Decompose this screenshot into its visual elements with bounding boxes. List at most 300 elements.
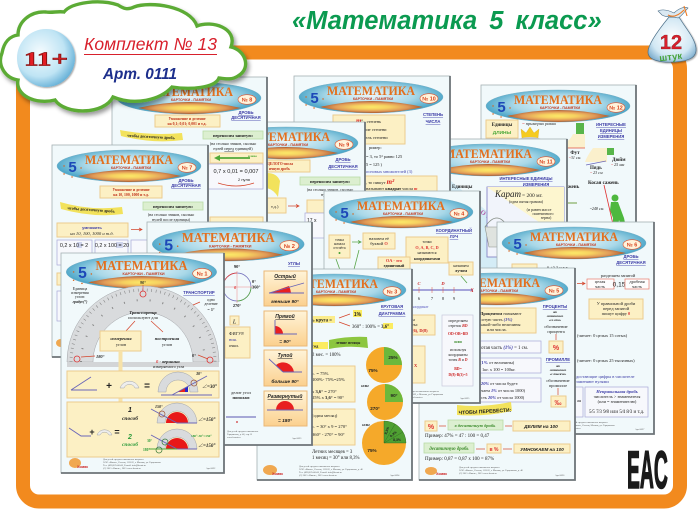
arrow <box>555 334 557 340</box>
box: единичный отрезок: OA - это <box>386 258 403 263</box>
grid box: определяем: OD-OB=BD <box>448 332 468 336</box>
одно деление: деление <box>204 302 218 306</box>
box: и т.д.: т.д.) <box>271 204 279 209</box>
header card 9 <box>214 127 358 159</box>
number line <box>412 281 474 301</box>
box: острый: Острый <box>274 273 296 280</box>
box: называем луч: лучом <box>455 268 467 273</box>
box: расчёт 1: 100%- 75%=25% <box>312 377 345 382</box>
grid box: определяем: D(8)-B(3)=5 <box>449 373 468 377</box>
дюйм <box>611 158 626 167</box>
box: тупой: больше 90° <box>271 378 299 385</box>
EAC mark: EAC <box>627 442 668 500</box>
arrows <box>336 250 467 283</box>
heading <box>423 112 443 124</box>
header card 4 <box>329 196 473 228</box>
blue note: достающие цифры в числителе <box>576 374 635 379</box>
box: координаты: м <box>412 317 415 322</box>
pie chart 8,3%: 8,3% <box>384 426 390 435</box>
box: расчёт 2: 360° - 270° = 90° <box>312 432 345 437</box>
arrow <box>439 425 446 427</box>
box: умножить <box>57 223 128 237</box>
box: неправильная дробь <box>585 387 648 417</box>
footer: ООО «Квант», Россия, 115162, г. Москва, ул. Гарцовская <box>103 461 162 464</box>
number line: 6 <box>418 296 421 301</box>
box: измерения углов: углов <box>116 342 126 347</box>
box: переносим запятую: (на столько знаков, сколько <box>307 187 353 193</box>
footer: Арт 0026 <box>555 474 565 477</box>
box: тупой: Тупой <box>278 352 292 359</box>
header card 6: 5 <box>513 236 522 253</box>
icon: foot <box>559 123 585 148</box>
heading: ДРОБЬ <box>238 110 254 115</box>
box: в % <box>487 444 501 453</box>
header card 12: КАРТОЧКИ - ПАМЯТКИ <box>540 106 581 110</box>
header card 1: КАРТОЧКИ - ПАМЯТКИ <box>123 272 165 276</box>
heading <box>379 304 405 316</box>
box: расчёт 1: с. = 75% <box>312 371 329 376</box>
footer: Хомяк <box>436 472 447 476</box>
header card 6: МАТЕМАТИКА <box>530 229 619 244</box>
примерно равно: ~ примерно равно <box>522 121 557 126</box>
ribbon: чтобы десятичную дробь <box>127 133 176 140</box>
box: карат: Карат <box>494 189 521 199</box>
разделяем запятой: разделяем запятой <box>601 273 636 278</box>
box: координаты: (6), D(8) <box>412 328 428 333</box>
box: определение степени: затель степени <box>360 135 388 140</box>
box: переносим запятую: нулей до... <box>321 192 339 197</box>
box: переносим запятую <box>203 131 263 151</box>
circle of degrees <box>221 264 261 308</box>
icon: permille box <box>551 396 566 407</box>
единицы длины: Единицы <box>492 123 512 128</box>
card 2: углы <box>147 222 312 445</box>
box: точка начала отсчёта: отсчёта <box>333 246 346 250</box>
header card 10 <box>299 81 443 113</box>
box: делим на 100: ДЕЛИМ на 100 <box>523 424 558 430</box>
пример 1: Пример: 47% = 47 : 100 = 0,47 <box>425 434 490 439</box>
circle of degrees: 270° <box>233 303 241 308</box>
box: умножить: умножить <box>82 225 102 230</box>
box: точки <box>406 237 448 263</box>
вершина <box>153 359 184 369</box>
grid box: определяем: точек B и D <box>448 358 468 362</box>
pie chart 25%: 25% <box>388 355 398 360</box>
header card 1: 5 <box>78 265 87 282</box>
panel 2: угол 150: способ <box>122 441 138 448</box>
box: L: L <box>232 318 237 326</box>
header card 2: № 2 <box>284 244 295 250</box>
footer: ООО «Квант», Россия, Москва, ул. Гарцовская <box>567 424 615 427</box>
box: 1% <box>353 310 362 318</box>
box: площадь круга <box>307 316 335 324</box>
box: лево <box>408 346 425 383</box>
фут: Фут <box>570 151 580 156</box>
footer: Арт 0024 <box>390 474 400 477</box>
сажень 2: жень <box>568 185 580 190</box>
header card 12: 5 <box>497 99 506 116</box>
читает 1: (читает: 0 целых 15 сотых) <box>577 333 628 338</box>
box: неправильная дробь: 5⁄5 7⁄3 9⁄8 или 5⁄4 8⁄3 и т.д. <box>589 410 644 415</box>
пядь: ~ 23 см <box>590 170 603 175</box>
card 11: карат <box>411 139 567 351</box>
grid box: пример: 17 x <box>307 218 317 224</box>
grid box: 0,7 x 0,01: 0,7 x 0,01 = 0,007 <box>214 169 258 175</box>
ribbon: чтобы перевести <box>457 402 512 416</box>
circle of degrees: 360° <box>252 284 261 290</box>
header card 11: МАТЕМАТИКА <box>444 146 533 161</box>
header card 3: № 3 <box>387 290 397 296</box>
text: пример: 5 = 125 ) <box>366 162 383 167</box>
box: расчёт 1: х 3,6° = 270° <box>312 389 337 394</box>
построения углов: углов <box>162 342 172 347</box>
единица измерения углов <box>71 287 89 304</box>
год + ribbon: год <box>312 344 319 348</box>
box: определение степени: - степень <box>363 119 381 124</box>
box: переносим запятую <box>300 177 360 197</box>
одно деление: одно <box>207 298 215 302</box>
box: определение степени: n <box>361 118 363 122</box>
header card 12 <box>486 90 630 122</box>
box: 20%: чаем 1% от числа 1000) <box>481 388 526 393</box>
heading <box>231 110 261 120</box>
grid box: третий <box>131 240 159 265</box>
example fractions: 5 +3 3 и т.д. <box>547 265 569 270</box>
box: умножение и деление <box>155 115 220 127</box>
box: острый: меньше 90° <box>271 299 299 305</box>
title: «Математика 5 класс» <box>292 7 602 35</box>
вершина: 0 - вершина <box>156 359 180 364</box>
box: переносим запятую: переносим запятую: <box>213 133 254 138</box>
heading: ДРОБЬ <box>178 178 194 183</box>
box: умножение и деление: Умножение и деление <box>112 188 150 192</box>
label в: в <box>236 419 238 424</box>
box: сотая часть <box>477 341 541 353</box>
целая и дробная часть: 0,15 <box>613 282 626 288</box>
box: верхний <box>512 264 537 274</box>
box: умножаем на 100 <box>514 444 570 453</box>
биссектриса: пополам <box>232 395 250 400</box>
header card 8: КАРТОЧКИ - ПАМЯТКИ <box>171 98 212 102</box>
обозначение 2: обозначение <box>546 378 570 383</box>
box: карат: пшеничного <box>533 211 553 216</box>
blue text: координат <box>412 305 429 309</box>
box: в десятичную дробь: в десятичную дробь <box>455 423 495 428</box>
box: квадрат: , то пишут m² <box>366 178 395 186</box>
grid left <box>555 387 583 417</box>
light blue triangle <box>411 181 501 351</box>
box: единичный отрезок <box>378 257 410 270</box>
number line: D <box>440 281 445 286</box>
box: умножение и деление: на 10, 100, 1000 и т.д. <box>113 193 149 197</box>
248 см: ~248 см. <box>590 206 604 211</box>
heading: ДИАГРАММА <box>379 311 405 316</box>
footer: ООО «Квант», Россия, 115162, г. Москва, ул. Гарцовская, д. 46 <box>459 469 524 472</box>
header card 10: 5 <box>310 90 319 107</box>
box: точки: точки <box>422 240 432 244</box>
card 4: координатный луч <box>324 191 480 403</box>
box: фигура: ния. <box>229 337 237 342</box>
panel 2: угол 150: = <box>114 427 120 437</box>
panel 2: угол 150 <box>67 402 219 457</box>
box: точка начала отсчёта: начала <box>334 242 345 246</box>
heading: ДЕСЯТИЧНАЯ <box>171 183 201 188</box>
blue note <box>576 374 635 384</box>
box: лево: X <box>414 363 418 368</box>
footer: Для детей среднего школьного возраста <box>459 466 500 469</box>
grid box: определяем: или <box>454 339 462 344</box>
heading <box>436 228 472 239</box>
box: карат <box>487 187 564 257</box>
box: в %: в % <box>490 447 499 453</box>
number line: 9 <box>453 296 456 301</box>
cloud badge <box>0 2 246 111</box>
косая сажень: Косая сажень <box>588 181 619 186</box>
pie chart 8,3%: 8,3% <box>389 430 398 438</box>
360 : 100 <box>352 323 393 330</box>
box: L <box>230 316 239 326</box>
год + ribbon: летние месяцы <box>336 341 360 345</box>
heading промилле: ПРОМИЛЛЕ <box>546 357 570 362</box>
box: процентом называют: сотую часть (1%) <box>480 317 513 322</box>
heading: ИНТЕРЕСНЫЕ ЕДИНИЦЫ <box>499 176 553 181</box>
card 3: круговая диаграмма <box>257 269 412 480</box>
icon: crown <box>521 127 539 138</box>
card 9: дробь десятичная <box>209 122 365 334</box>
footer: 115162, г. Москва, ул. Гарцовская <box>409 393 444 396</box>
header card 4: № 4 <box>454 212 464 218</box>
box: влево: влево <box>248 154 257 158</box>
heading: ИЗМЕРЕНИЯ <box>598 134 624 139</box>
icon: stone circle <box>516 137 544 147</box>
box: расчёт 2: с. = 30° х 9 = 270° <box>312 424 347 429</box>
age circle 11+: 11+ <box>24 48 68 70</box>
grid box: определяем <box>442 315 473 386</box>
box: острый <box>264 271 307 306</box>
box: измерения углов <box>100 331 141 351</box>
header card 10: МАТЕМАТИКА <box>327 83 416 98</box>
box: % <box>425 421 437 431</box>
box: умножаем на 100: УМНОЖАЕМ на 100 <box>520 447 564 452</box>
header card 3: МАТЕМАТИКА <box>290 276 379 291</box>
footer: (С) 2015 «Квант», 2015 www.kvant.ru <box>103 467 142 470</box>
header card 5: КАРТОЧКИ - ПАМЯТКИ <box>478 289 519 293</box>
ribbon <box>60 202 123 215</box>
дюйм: ~ 25 мм <box>611 162 625 167</box>
circle of degrees: 90° <box>234 264 240 269</box>
panel 1: угол 30: + <box>106 381 112 392</box>
cloud shape <box>0 2 246 111</box>
text: пример: ример: <box>369 145 382 150</box>
целая и дробная часть <box>587 279 649 289</box>
grid box: 0,2 x 10 = 2 <box>57 240 92 265</box>
heading: ИЗМЕРЕНИЯ <box>523 182 549 187</box>
circle of degrees: 0° <box>252 279 256 284</box>
пример 2: Пример: 0,87 = 0,87 х 100 = 87% <box>425 457 494 462</box>
единица измерения углов: Единица <box>73 287 87 291</box>
header card 2: КАРТОЧКИ - ПАМЯТКИ <box>209 244 252 248</box>
читает 2: (читает: 0 целых 25 тысячных) <box>577 358 635 363</box>
arrow <box>288 204 299 208</box>
header card 6: № 6 <box>627 242 637 248</box>
icon: bag 12 штук: 12 <box>660 32 682 54</box>
grid left: ая <box>577 398 581 403</box>
box: величина: (1% от величины) <box>480 360 515 365</box>
number line: 7 <box>431 296 434 301</box>
grid box: 0,2 x 100 = 20: 0,2 x 100 = 20 <box>95 243 129 249</box>
panel 2: угол 150: способ <box>122 415 138 422</box>
arrow <box>476 448 485 450</box>
icon: permille box: ‰ <box>554 400 562 407</box>
latin note 2: от <box>556 364 561 368</box>
footer <box>69 458 216 470</box>
единицы: Единицы <box>452 185 473 190</box>
целая и дробная часть: часть <box>632 284 642 289</box>
footer <box>227 430 302 440</box>
icon: bag 12 штук: штук <box>659 51 683 64</box>
logo <box>56 339 66 347</box>
box: переносим запятую: (на столько знаков, сколько <box>210 141 256 147</box>
grid box: определяем: определяем <box>448 319 468 323</box>
0: 0° <box>192 353 196 358</box>
icon: percent box <box>549 341 563 353</box>
box: %: % <box>428 424 435 431</box>
одно деление <box>193 298 218 312</box>
heading: ТРАНСПОРТИР <box>183 290 215 295</box>
box: карат: = 200 мг. <box>522 193 543 199</box>
летние месяцы: Летних месяцев = 3 <box>312 450 353 455</box>
number line: C <box>417 281 421 286</box>
box: расчёт 2 <box>307 409 355 445</box>
latin note: латинского <box>546 314 564 318</box>
footer: ООО «Квант», Россия, 115162, г. Москва, ул. Гарцовская, д. 46 <box>299 468 364 471</box>
построения углов <box>155 336 180 347</box>
box: координаты: ты: <box>412 322 418 327</box>
footer: Для детей среднего школьного возраста <box>299 465 340 468</box>
pie chart 8,3% <box>362 421 406 465</box>
box: переносим запятую: нулей после единицы) <box>152 217 191 222</box>
panel 1: угол 30: 30° <box>195 371 202 376</box>
box: величина: 1кг. x 100 = 100кг. <box>482 367 516 372</box>
footer: Хомяк <box>77 465 88 469</box>
heading: ЕДИНИЦЫ <box>600 128 622 133</box>
grid box: 0,2 x 10 = 2: 0,2 x 10 = 2 <box>60 243 88 249</box>
180: 180° <box>96 354 105 359</box>
или: или <box>361 383 369 388</box>
grid box: определяем: координаты <box>448 353 468 357</box>
heading: СТЕПЕНЬ <box>423 112 443 117</box>
box: развернутый <box>264 391 307 426</box>
panel 1: угол 30: ∠=30° <box>202 384 217 390</box>
panel 2: угол 150: 180° <box>143 448 150 452</box>
box: квадрат: называют квадрат числа m <box>366 186 418 191</box>
box: правильная дробь: У правильной дроби <box>597 301 636 306</box>
latin note: от <box>553 310 558 314</box>
ribbon <box>267 173 280 197</box>
heading: ЧИСЛА <box>426 119 440 124</box>
целая и дробная часть: дробная <box>629 279 645 284</box>
card 1: транспортир <box>61 253 224 473</box>
text: пример: = 3, то 5³ равно 125 <box>366 154 403 160</box>
header card 2: 5 <box>164 237 173 254</box>
артикул: Арт. 0111 <box>102 66 177 83</box>
footer: Для детей среднего школьного возраста <box>103 458 144 461</box>
одно деление: = 1° <box>207 307 215 312</box>
box: карат: зерна) <box>541 215 552 220</box>
180 <box>81 354 105 359</box>
protractor: 90° <box>140 280 146 285</box>
биссектриса <box>231 390 252 400</box>
header card 5: № 5 <box>549 288 559 294</box>
header card 8: № 8 <box>242 98 252 104</box>
footer: Для детей среднего школьного возраста <box>567 421 608 424</box>
box: точка начала отсчёта <box>329 235 350 258</box>
header card 8 <box>117 82 261 114</box>
box: величина <box>478 358 541 373</box>
header card 8: МАТЕМАТИКА <box>145 84 234 99</box>
header card 7: КАРТОЧКИ - ПАМЯТКИ <box>111 166 152 170</box>
card 8: дробь десятичная <box>112 77 267 289</box>
box: правильная дробь: перед запятой <box>603 306 630 311</box>
heading: ЛУЧ <box>450 234 458 239</box>
обозначение: обозначение <box>544 324 568 329</box>
footer <box>409 390 470 400</box>
footer: Тел. (495)625-00-00, E-mail: info@kvant.ru <box>103 464 147 467</box>
header card 12: № 12 <box>609 106 623 112</box>
footer: Тел. (495)625-00-00, E-mail: info@kvant.ru <box>299 471 343 474</box>
box: переносим запятую: переносим запятую: <box>310 179 351 184</box>
box: умножение и деление: Умножение и деление <box>168 117 206 121</box>
blue note: заменяют нулями <box>576 379 609 384</box>
box: развернутый: Развернутый <box>268 393 302 400</box>
header card 7 <box>57 150 201 182</box>
header card 5 <box>424 273 568 305</box>
box: умножение на дробь <box>249 160 310 172</box>
box: и т.д. <box>214 198 286 213</box>
фут <box>569 151 581 160</box>
footer: (С) 2015 «Квант», 2015 www.kvant.ru <box>299 474 338 477</box>
arrow <box>131 228 142 231</box>
box: квадрат <box>363 176 437 192</box>
header card 3: КАРТОЧКИ - ПАМЯТКИ <box>316 290 357 294</box>
header card 5: МАТЕМАТИКА <box>452 275 541 290</box>
card 6: дробь десятичная <box>497 222 654 434</box>
header card 4: КАРТОЧКИ - ПАМЯТКИ <box>383 212 424 216</box>
объёма: ОБЪЁМА <box>479 209 517 238</box>
box: 20% <box>478 378 541 402</box>
panel 2: угол 150: + <box>89 427 95 437</box>
header card 1: № 1 <box>197 272 208 278</box>
единица измерения углов: градус(°) <box>73 300 88 304</box>
обозначение 2 <box>546 378 570 388</box>
footer <box>567 421 645 431</box>
footer <box>425 466 565 477</box>
box: расчёт 2: (один месяц) <box>312 413 338 418</box>
heading: ДРОБЬ <box>336 157 350 162</box>
box: площадь круга: ь круга = <box>312 318 332 324</box>
фут: ~31 см. <box>569 155 581 160</box>
heading: ДРОБЬ <box>624 254 638 259</box>
heading: ДЕСЯТИЧНАЯ <box>616 260 646 265</box>
header card 7: 5 <box>68 159 77 176</box>
box: точки: O, A, B, C, D <box>415 245 439 250</box>
panel 2: угол 150: 1 <box>128 407 132 414</box>
box: называем луч <box>449 262 473 275</box>
panel 2: угол 150: 30° <box>147 439 153 443</box>
целая и дробная часть: часть <box>595 284 605 289</box>
header card 11: № 11 <box>539 160 553 166</box>
footer: www.kvant.ru <box>409 396 423 399</box>
